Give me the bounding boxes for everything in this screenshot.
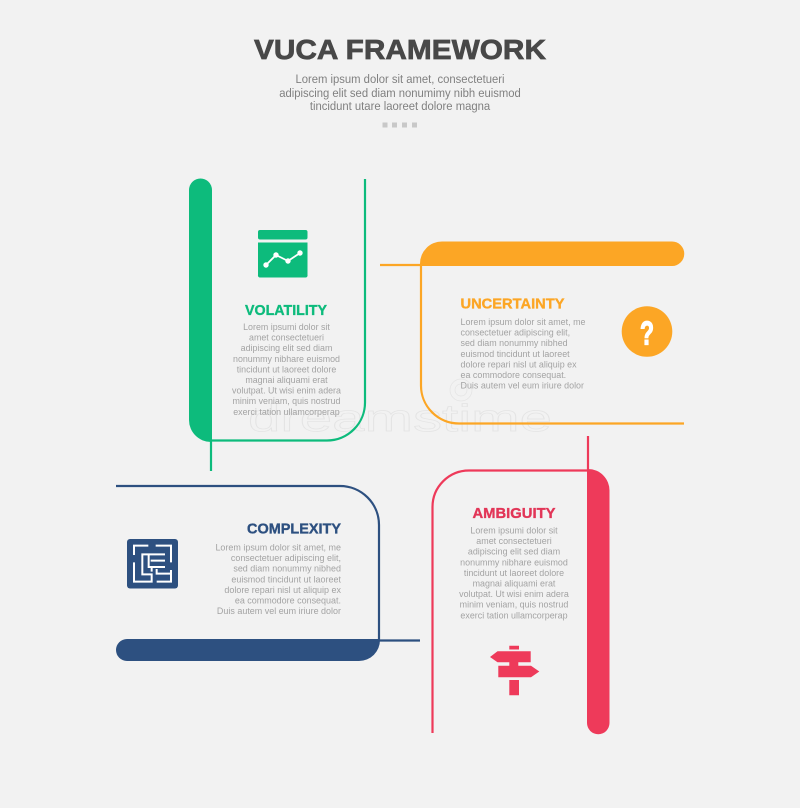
- text: ambiguity: nonummy nibhare euismod: [460, 557, 568, 567]
- text: uncertainty: ea commodore consequat.: [461, 370, 566, 380]
- orange bar: [420, 242, 684, 266]
- navy bar: [116, 639, 380, 661]
- text: complexity: [215, 542, 341, 616]
- green frame: [211, 179, 365, 471]
- text: complexity: sed diam nonummy nibhed: [233, 563, 341, 574]
- text: complexity: consectetuer adipiscing elit,: [231, 553, 341, 563]
- red bar: [587, 469, 610, 734]
- navy frame: [116, 486, 420, 640]
- text: complexity: Lorem ipsum dolor sit amet, me: [215, 542, 341, 553]
- icon: question mark: [622, 306, 672, 357]
- text: uncertainty: Lorem ipsum dolor sit amet, me: [461, 317, 585, 327]
- green bar: [189, 179, 212, 442]
- icon: chart window: [258, 230, 308, 278]
- heading: uncertainty: UNCERTAINTY: [460, 296, 564, 312]
- text: uncertainty: dolore repari nisl ut aliquip ex: [461, 359, 577, 369]
- text: uncertainty: euismod tincidunt ut laoreet: [461, 349, 570, 359]
- orange frame: [380, 265, 684, 424]
- subtitle: [279, 73, 521, 113]
- text: volatility: tincidunt ut laoreet dolore: [237, 364, 336, 374]
- text: uncertainty: consectetuer adipiscing elit,: [461, 327, 570, 338]
- text: volatility: minim veniam, quis nostrud: [233, 396, 340, 406]
- heading: ambiguity: AMBIGUITY: [472, 505, 556, 522]
- text: ambiguity: [459, 525, 570, 620]
- title dots: [382, 122, 417, 128]
- panel: uncertainty: [380, 242, 684, 424]
- text: complexity: Duis autem vel eum iriure dolor: [217, 606, 341, 616]
- text: volatility: adipiscing elit sed diam: [241, 343, 333, 353]
- text: volatility: volutpat. Ut wisi enim adera: [232, 385, 342, 396]
- text: ambiguity: exerci tation ullamcorperap: [460, 610, 568, 620]
- text: uncertainty: sed diam nonummy nibhed: [461, 338, 568, 348]
- text: volatility: magnai aliquami erat: [245, 375, 328, 385]
- text: ambiguity: amet consectetueri: [476, 536, 552, 546]
- text: ambiguity: volutpat. Ut wisi enim adera: [459, 589, 570, 599]
- text: complexity: ea commodore consequat.: [235, 595, 341, 606]
- text: ambiguity: Lorem ipsumi dolor sit: [470, 525, 558, 536]
- text: uncertainty: [460, 317, 585, 391]
- heading: complexity: COMPLEXITY: [247, 520, 341, 538]
- text: ambiguity: minim veniam, quis nostrud: [460, 599, 568, 610]
- subtitle: tincidunt utare laoreet dolore magna: [310, 100, 491, 113]
- text: ambiguity: tincidunt ut laoreet dolore: [464, 568, 564, 578]
- title: VUCA FRAMEWORK: [254, 34, 546, 65]
- text: volatility: exerci tation ullamcorperap: [233, 406, 340, 417]
- text: volatility: [232, 322, 342, 417]
- red frame: [432, 436, 588, 733]
- text: uncertainty: Duis autem vel eum iriure dolor: [461, 380, 584, 391]
- text: volatility: Lorem ipsumi dolor sit: [243, 322, 330, 332]
- panel: complexity: [116, 486, 420, 661]
- icon: maze: [127, 539, 178, 588]
- text: volatility: nonummy nibhare euismod: [233, 353, 340, 364]
- icon: question mark: ?: [640, 314, 654, 352]
- panel: volatility: [189, 179, 365, 471]
- heading: volatility: VOLATILITY: [245, 302, 327, 319]
- text: ambiguity: magnai aliquami erat: [473, 578, 556, 589]
- subtitle: adipiscing elit sed diam nonumimy nibh euismod: [279, 87, 521, 100]
- text: complexity: dolore repari nisl ut aliquip ex: [224, 585, 341, 595]
- text: dreamstime: [248, 398, 552, 440]
- text: complexity: euismod tincidunt ut laoreet: [231, 574, 341, 584]
- panel: ambiguity: [432, 436, 610, 734]
- icon: signpost: [490, 646, 539, 695]
- text: ambiguity: adipiscing elit sed diam: [468, 546, 560, 557]
- subtitle: Lorem ipsum dolor sit amet, consectetueri: [295, 73, 505, 86]
- text: volatility: amet consectetueri: [249, 332, 324, 343]
